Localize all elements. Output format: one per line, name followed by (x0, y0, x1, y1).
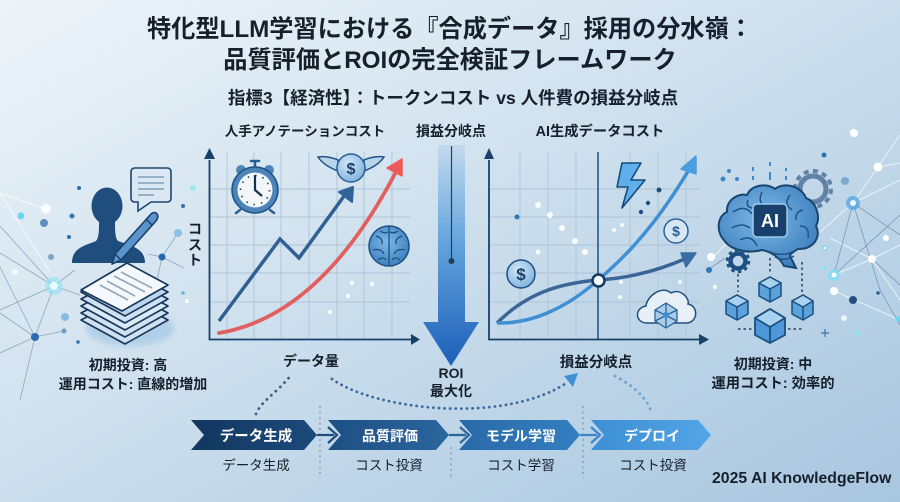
icon: winged coin: $ (347, 161, 356, 178)
step: deploy (591, 420, 711, 450)
dotted arrow: data generation to data volume (256, 374, 292, 414)
icon: dollar coin left (507, 260, 535, 288)
process flow (191, 420, 711, 450)
icon: person silhouette (72, 188, 145, 263)
connector lines (738, 258, 803, 329)
axis label: cost: コ (188, 221, 202, 237)
icon: brain (369, 226, 409, 266)
ROI label: ROI (439, 365, 463, 381)
axis label: cost: ス (188, 237, 202, 253)
step captions: コスト学習 (487, 458, 555, 473)
line: light blue cost curve (497, 156, 696, 323)
icon: speech bubble (131, 168, 171, 211)
icon: winged coin (318, 154, 384, 182)
sparkles (328, 281, 374, 314)
icon: dollar coin right: $ (672, 223, 680, 239)
sparkles (535, 202, 682, 299)
ROI label: 最大化 (430, 383, 472, 399)
icon: gear small (727, 250, 749, 272)
chart axes (484, 148, 709, 345)
title (147, 15, 753, 74)
chart: AI data cost (484, 148, 709, 345)
icon: cloud network (637, 290, 696, 328)
heading: break-even: 損益分岐点 (416, 123, 486, 139)
line: dark cost curve (497, 253, 696, 323)
title: 品質評価とROIの完全検証フレームワーク (223, 47, 677, 74)
step: quality evaluation (328, 420, 449, 450)
step captions: データ生成 (222, 457, 290, 473)
break-even marker line (448, 146, 454, 264)
step: data generation (191, 420, 317, 450)
AI badge: AI (761, 211, 779, 231)
right network decoration (706, 129, 900, 337)
icon: pen (112, 212, 158, 264)
axis label: break-even: 損益分岐点 (560, 353, 633, 371)
arrow (317, 427, 337, 443)
dotted line: deploy to break-even (615, 376, 652, 414)
left network decoration (0, 185, 196, 400)
step: model training (459, 420, 580, 450)
central ROI arrow (423, 145, 479, 366)
step captions: コスト投資 (619, 458, 687, 473)
icon: dollar coin left: $ (516, 265, 526, 284)
icon: AI brain with cubes (719, 162, 831, 343)
icon: cube right (792, 295, 813, 320)
icon: alarm clock (232, 161, 278, 213)
subtitle: 指標3【経済性】：トークンコスト vs 人件費の損益分岐点 (228, 88, 678, 108)
line: human cost (blue) (219, 187, 353, 321)
heading: human annotation cost: 人手アノテーションコスト (225, 123, 385, 139)
step captions (222, 457, 687, 473)
dots (514, 188, 662, 220)
icon: annotator with documents (72, 168, 174, 346)
text: right cost summary: 運用コスト: 効率的 (711, 374, 835, 392)
dotted arrow: quality to break-even (332, 373, 578, 409)
AI badge (753, 204, 787, 237)
chart axes (204, 148, 420, 345)
step: deploy: デプロイ (624, 428, 680, 444)
title: 特化型LLM学習における『合成データ』採用の分水嶺： (147, 15, 753, 43)
arrow (449, 427, 469, 443)
chart: human annotation cost (204, 148, 420, 345)
text: left cost summary: 運用コスト: 直線的増加 (59, 376, 207, 392)
text: right cost summary (711, 356, 835, 392)
icon: data particles (720, 162, 786, 182)
step: quality evaluation: 品質評価 (362, 428, 418, 444)
step: model training: モデル学習 (486, 428, 556, 444)
ROI label (430, 365, 472, 399)
icon: stack of documents (81, 263, 174, 346)
axis label: data volume: データ量 (283, 353, 339, 369)
step captions: コスト投資 (355, 458, 423, 473)
break-even point marker (592, 274, 604, 286)
text: right cost summary: 初期投資: 中 (734, 356, 812, 372)
stage dividers (320, 406, 583, 478)
icon: gear large (795, 171, 831, 207)
axis label: cost: ト (188, 252, 202, 268)
icon: dollar coin right (664, 219, 688, 243)
icon: lightning bolt (617, 163, 645, 208)
step: data generation: データ生成 (220, 427, 293, 445)
icon: brain (719, 185, 818, 268)
footer credit: 2025 AI KnowledgeFlow (712, 470, 892, 487)
icon: cube left (726, 295, 748, 320)
heading: AI data cost: AI生成データコスト (536, 122, 664, 140)
text: left cost summary: 初期投資: 高 (89, 357, 167, 373)
icon: cube large (755, 309, 785, 343)
icon: cube top (759, 277, 781, 302)
arrow (580, 427, 600, 443)
text: left cost summary (59, 357, 207, 392)
line: human cost (red) (219, 159, 402, 333)
